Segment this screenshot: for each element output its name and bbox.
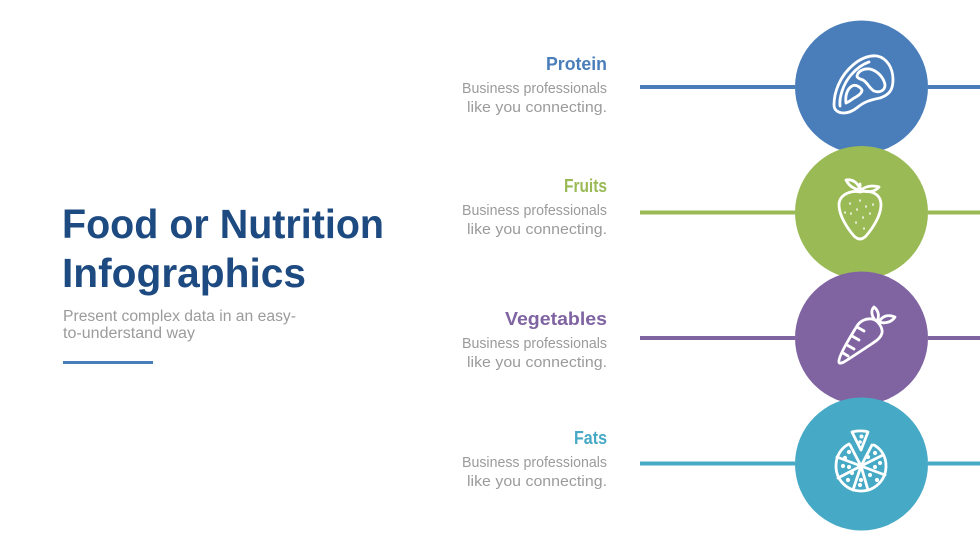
panel: fats row — [462, 398, 980, 530]
fruits connector line — [640, 210, 980, 214]
subtitle: to-understand way — [63, 325, 195, 342]
panel: fruits row — [462, 146, 980, 279]
icon: steak — [834, 56, 893, 113]
fruits description: Business professionals — [462, 202, 607, 219]
subtitle — [63, 308, 296, 342]
protein connector line — [640, 85, 980, 89]
fats connector line — [640, 462, 980, 466]
fruits description: like you connecting. — [467, 221, 607, 238]
vegetables description: like you connecting. — [467, 354, 607, 371]
panel: vegetables row — [462, 272, 980, 404]
vegetables circle — [795, 272, 928, 404]
protein description: Business professionals — [462, 80, 607, 97]
vegetables description — [462, 335, 607, 371]
protein description: like you connecting. — [467, 99, 607, 116]
fats description: Business professionals — [462, 454, 607, 471]
icon: pizza — [836, 431, 886, 491]
fats description: like you connecting. — [467, 473, 607, 490]
subtitle: Present complex data in an easy- — [63, 308, 296, 325]
fats heading: Fats — [574, 428, 607, 448]
protein description — [462, 80, 607, 116]
title — [62, 201, 384, 296]
icon: carrot — [839, 307, 895, 363]
protein heading: Protein — [546, 54, 607, 74]
icon: strawberry — [839, 180, 881, 239]
fruits circle — [795, 146, 928, 279]
vegetables connector line — [640, 336, 980, 340]
vegetables description: Business professionals — [462, 335, 607, 352]
title: Infographics — [62, 250, 306, 296]
fruits heading: Fruits — [564, 176, 607, 196]
vegetables heading: Vegetables — [505, 309, 607, 329]
title underline accent — [63, 361, 153, 364]
panel: protein row — [462, 20, 980, 154]
fats circle — [795, 398, 928, 530]
fats description — [462, 454, 607, 490]
title: Food or Nutrition — [62, 201, 384, 247]
protein circle — [795, 20, 928, 154]
fruits description — [462, 202, 607, 238]
